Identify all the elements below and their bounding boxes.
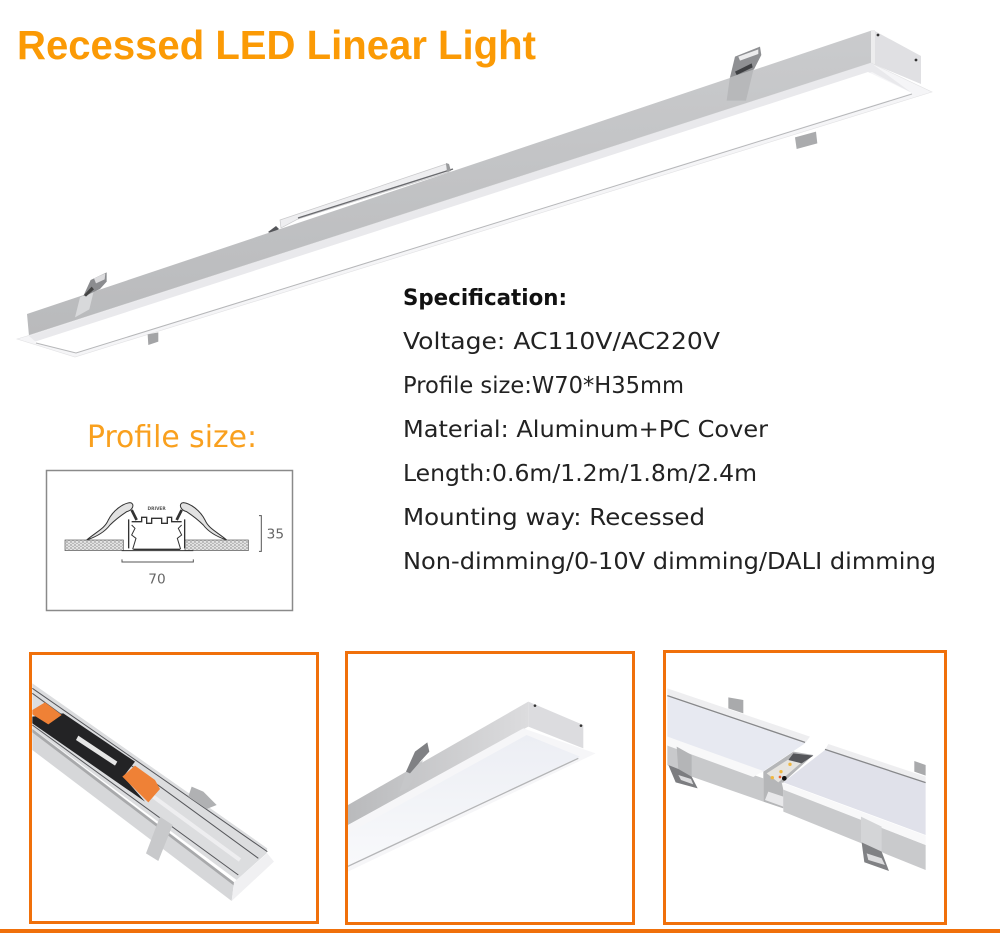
left segment xyxy=(667,688,810,802)
specification list: Mounting way: Recessed xyxy=(403,505,705,531)
main product image: recessed linear light xyxy=(17,30,932,357)
dimension 70 xyxy=(122,559,193,587)
left mounting clip xyxy=(75,272,158,345)
profile cross-section diagram xyxy=(46,470,292,610)
profile outline and spring clips xyxy=(87,503,227,551)
driver box on top of fixture xyxy=(268,163,453,234)
bottom orange rule xyxy=(0,929,1000,933)
left bottom tab xyxy=(148,332,158,345)
profile size heading: Profile size: xyxy=(87,420,257,455)
inner trim strip xyxy=(29,63,912,342)
ceiling panels xyxy=(65,540,248,551)
panel: fixture end photo xyxy=(346,652,634,924)
right bottom tab xyxy=(795,132,817,149)
panel: joint connector photo xyxy=(664,652,946,924)
grey side face xyxy=(348,702,528,825)
extrusion body xyxy=(32,683,267,880)
grey side face xyxy=(27,30,873,336)
specification list: Voltage: AC110V/AC220V xyxy=(403,329,720,355)
specification list: Profile size:W70*H35mm xyxy=(403,373,684,399)
mounting clips xyxy=(146,817,173,861)
dimension 35: 35 xyxy=(267,527,284,543)
specification list: Length:0.6m/1.2m/1.8m/2.4m xyxy=(403,461,757,487)
connector and LED board xyxy=(763,752,813,808)
specification list xyxy=(403,329,936,575)
panel: driver detail photo xyxy=(30,654,318,922)
specification heading: Specification: xyxy=(403,286,567,311)
clip xyxy=(417,760,424,766)
specification list: Non-dimming/0-10V dimming/DALI dimming xyxy=(403,549,936,575)
white trim xyxy=(348,728,596,872)
end face xyxy=(873,30,921,84)
title: Recessed LED Linear Light xyxy=(17,22,536,68)
driver unit xyxy=(32,713,145,802)
right mounting clip xyxy=(727,47,817,149)
diffuser lens xyxy=(34,72,912,353)
end face xyxy=(528,702,583,748)
lens xyxy=(491,735,574,756)
orange connectors xyxy=(32,702,62,724)
specification list: Material: Aluminum+PC Cover xyxy=(403,417,769,443)
driver label: DRIVER xyxy=(148,506,166,512)
dimension 70: 70 xyxy=(148,571,166,587)
white trim frame xyxy=(17,63,932,357)
right segment xyxy=(782,744,926,871)
dimension 35 xyxy=(259,516,284,551)
rear tabs xyxy=(728,697,743,713)
